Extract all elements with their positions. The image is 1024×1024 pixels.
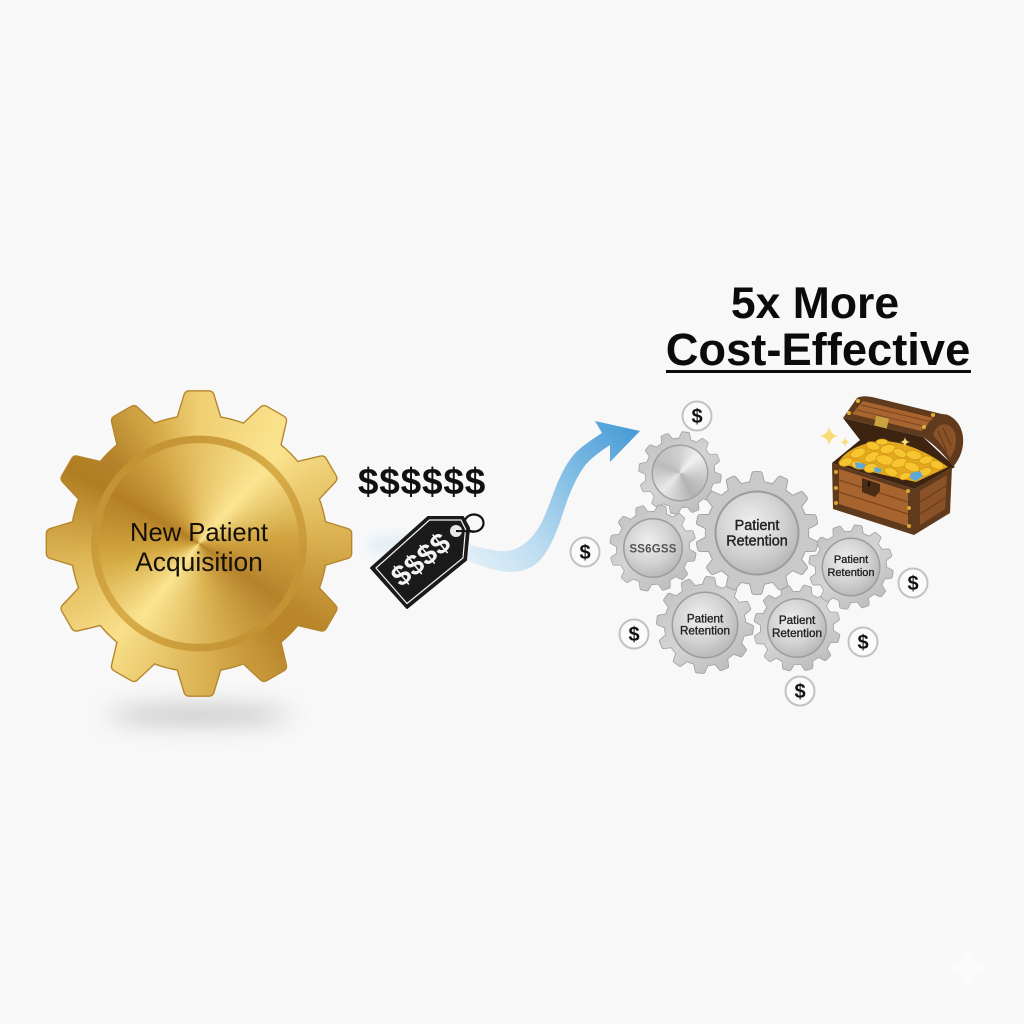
icon: dollar coin top [682,402,712,430]
panel: new patient acquisition gold gear [39,384,359,703]
icon: dollar coin bottom [786,676,814,706]
gear: bottom left patient retention: Patient [687,612,724,626]
icon: dollar coin lower right [848,628,878,656]
icon: dollar coin right [898,568,928,598]
icon: dollar coin left [570,538,600,566]
icon: sparkles [819,426,910,447]
watermark sparkle [944,944,992,992]
arrow [467,421,640,572]
pale glow behind tag [367,535,423,555]
icon: price tag [371,514,484,608]
icon: dollar coin right: $ [907,573,919,595]
icon: dollar coin bottom: $ [794,681,806,703]
icon: treasure chest [832,396,963,535]
gear: large patient retention: Retention [726,534,788,550]
gear: large patient retention: Patient [735,518,779,534]
gear: bottom left patient retention [656,576,754,674]
icon: price tag: $$$$ [385,527,457,593]
icon: dollar coin top: $ [691,406,703,428]
gear: bottom middle patient retention: Patient [779,614,816,627]
gear: bottom left patient retention: Retention [680,624,730,638]
icon: dollar coin lower right: $ [857,632,869,654]
gear: bottom middle patient retention [754,584,840,672]
cost symbols: $$$$$$ [358,461,486,502]
gear: large patient retention [696,472,818,594]
gear: right patient retention: Retention [827,567,875,579]
gold gear shadow [107,708,291,722]
gear: right patient retention: Patient [834,554,868,566]
icon: dollar coin lower left [620,620,648,648]
label: Acquisition [135,547,263,577]
gear: blank top [638,431,722,514]
title [666,279,971,375]
title: 5x More [731,279,899,328]
gear: right patient retention [808,524,894,610]
gear: garbled label: SS6GSS [629,544,677,556]
title: Cost-Effective [666,324,970,375]
gear: garbled label [610,504,696,592]
gear body [39,384,359,703]
icon: dollar coin left: $ [579,542,591,564]
icon: dollar coin lower left: $ [628,624,640,646]
gear: bottom middle patient retention: Retention [772,627,822,640]
label: New Patient [130,519,268,547]
